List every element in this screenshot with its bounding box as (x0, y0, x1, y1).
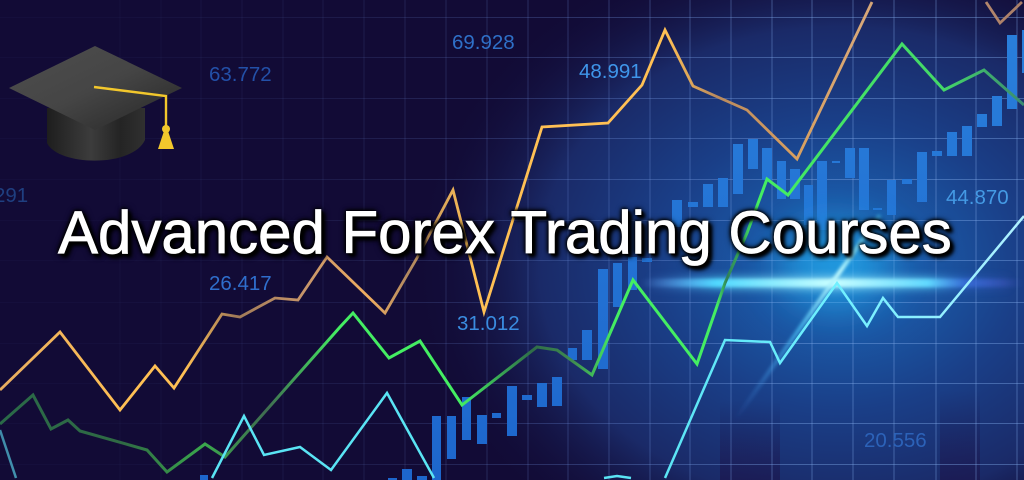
flare: light streaks (640, 215, 1024, 420)
icon: graduation cap (9, 46, 182, 161)
chart value labels: 44.870 (946, 186, 1009, 209)
tassel (94, 87, 174, 149)
cap base (47, 108, 145, 161)
chart value labels: 20.556 (864, 429, 927, 452)
chart value labels: 69.928 (452, 31, 515, 54)
candlestick bars (200, 30, 1024, 480)
chart value labels: 31.012 (457, 312, 520, 335)
chart value labels: 26.417 (209, 272, 272, 295)
title: Advanced Forex Trading Courses (58, 199, 952, 266)
cyan line series (0, 216, 1024, 478)
chart value labels: 63.772 (209, 63, 272, 86)
cap board (9, 46, 182, 130)
chart value labels: 48.991 (579, 60, 642, 83)
